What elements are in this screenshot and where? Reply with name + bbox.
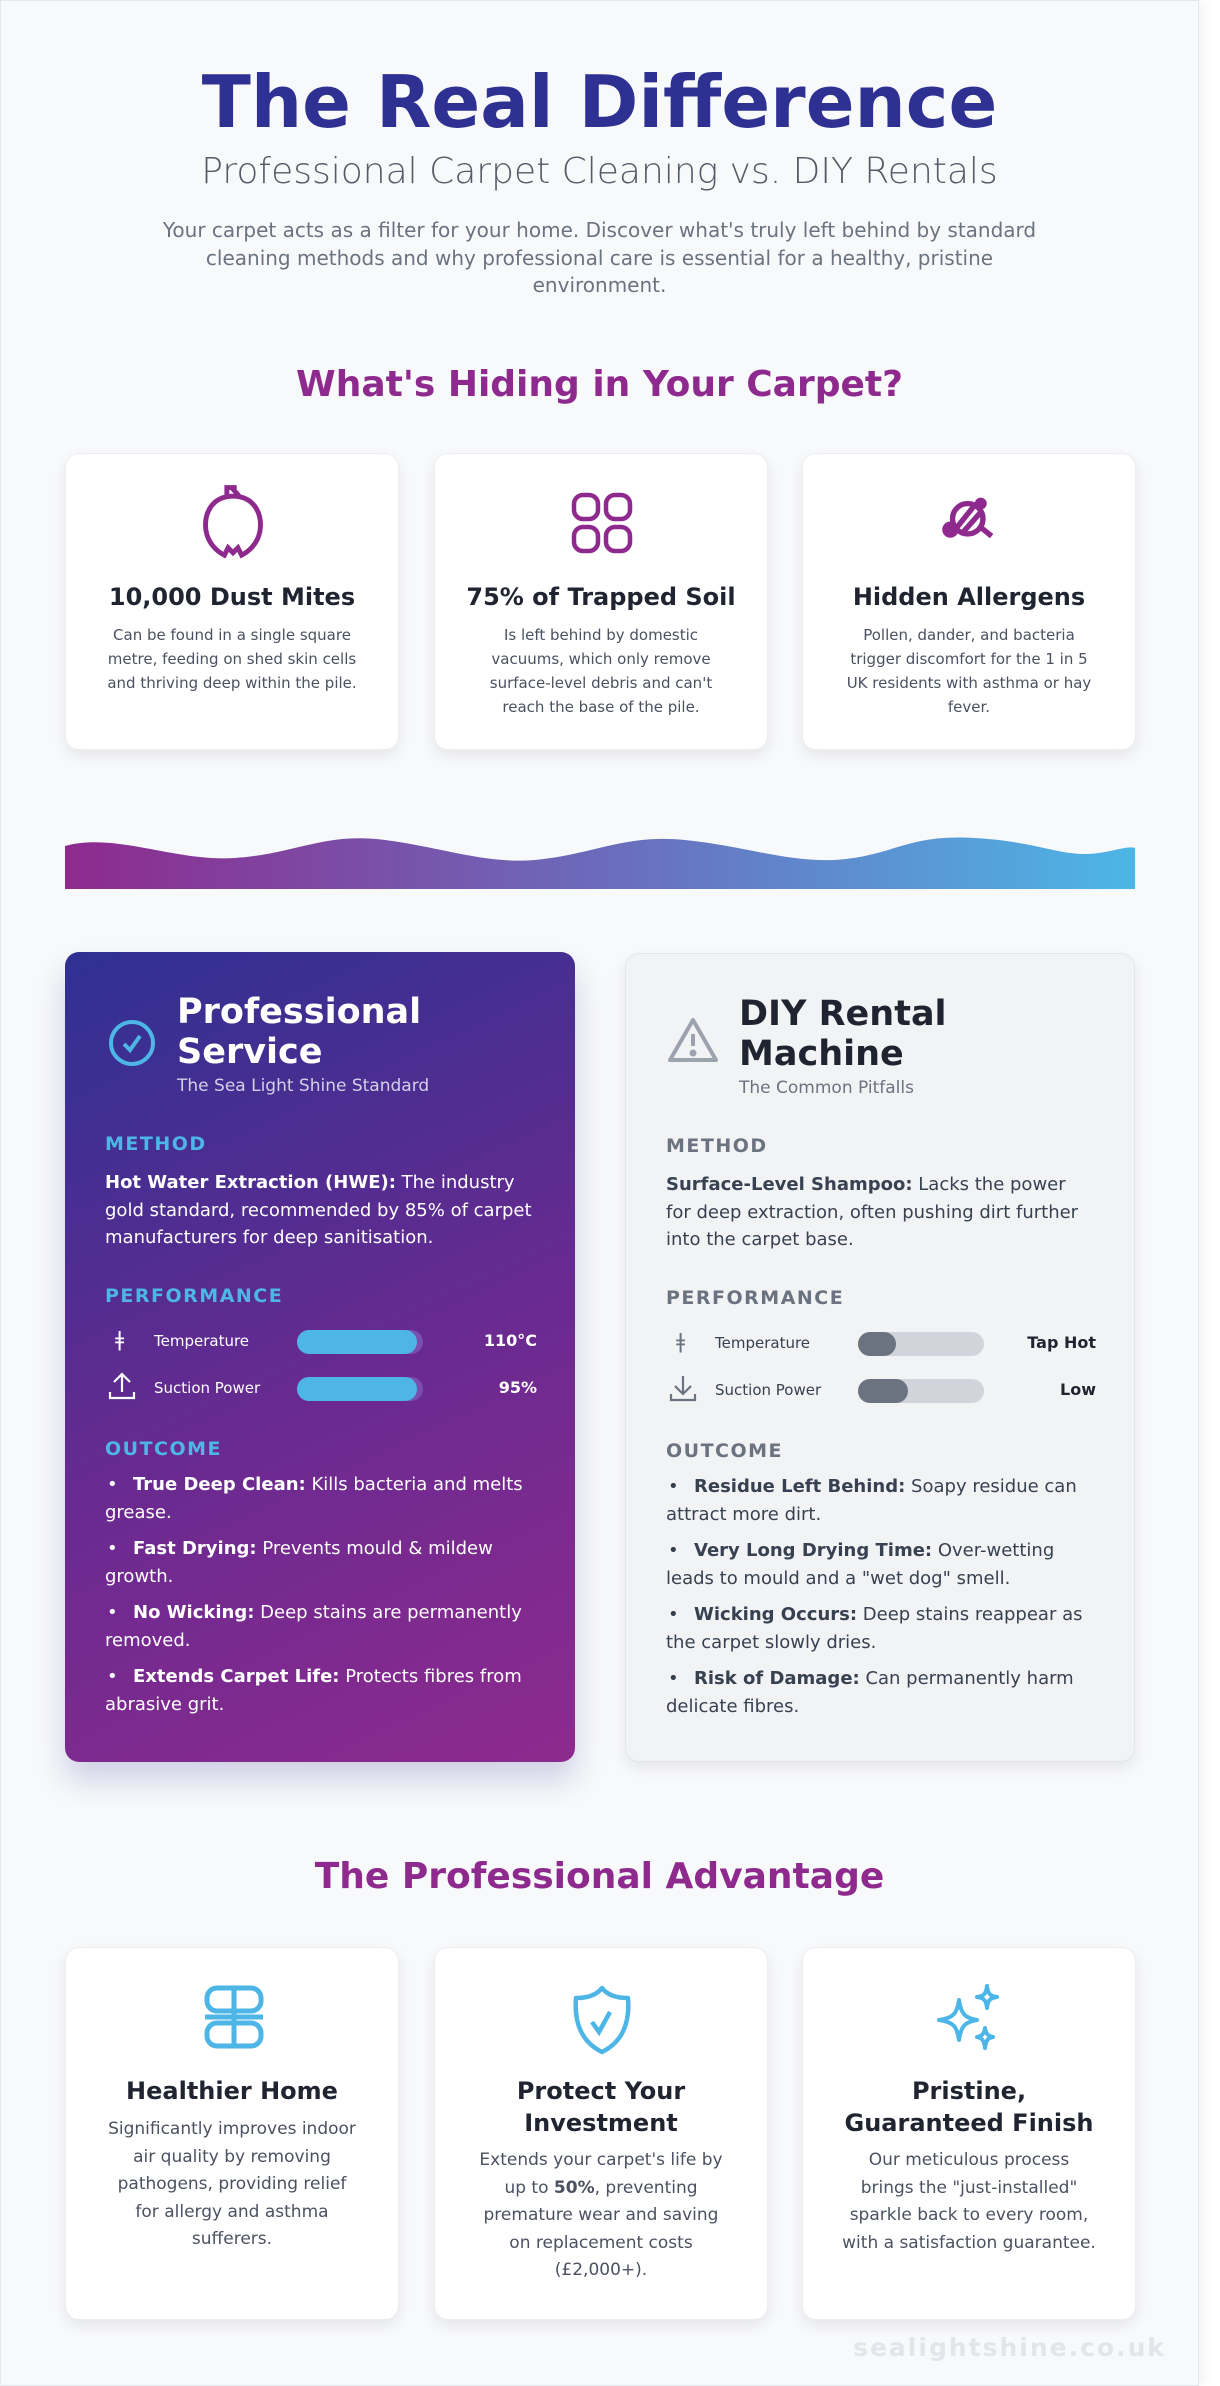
panel: DIY rental: The Common Pitfalls	[739, 1078, 914, 1098]
card: trapped soil: 75% of Trapped Soil	[466, 583, 736, 611]
card: pristine finish: Guaranteed Finish	[845, 2109, 1093, 2137]
outcome list: Fast Drying: Prevents mould & mildew growth.	[105, 1538, 493, 1586]
intro text: Your carpet acts as a filter for your home. Discover what's truly left behind by standard cleaning methods and why professional care is essential for a healthy, pristine environment.	[163, 218, 1036, 297]
card: allergens	[802, 453, 1136, 750]
card: dust mites: Can be found in a single square metre, feeding on shed skin cells and thriving deep within the pile.	[107, 626, 357, 692]
card: healthier home: Healthier Home	[126, 2077, 338, 2105]
bar: suction: 95%	[499, 1378, 537, 1397]
card: protect investment: Investment	[524, 2109, 678, 2137]
bar: temperature: 110°C	[484, 1331, 537, 1350]
card: trapped soil: Is left behind by domestic vacuums, which only remove surface-level debris and can't reach the base of the pile.	[490, 626, 712, 716]
footer: website: sealightshine.co.uk	[853, 2333, 1166, 2362]
icon: lungs/filter	[204, 1986, 264, 2048]
panel: DIY rental: OUTCOME	[666, 1440, 783, 1462]
card: allergens: Hidden Allergens	[853, 583, 1085, 611]
panel: professional service: Hot Water Extraction (HWE): The industry gold standard, recommended by 85% of carpet manufacturers for deep sanitisation.	[105, 1172, 532, 1248]
title: The Real Difference	[202, 60, 997, 144]
icon: shield	[573, 1986, 631, 2054]
panel: DIY rental: METHOD	[666, 1135, 768, 1157]
heading: Machine	[739, 1034, 904, 1074]
card: dust mites: 10,000 Dust Mites	[109, 583, 355, 611]
card: healthier home: Significantly improves indoor air quality by removing pathogens, providing relief for allergy and asthma sufferers.	[108, 2119, 356, 2249]
outcome list: True Deep Clean: Kills bacteria and melts grease.	[105, 1474, 523, 1522]
outcome list: Risk of Damage: Can permanently harm delicate fibres.	[666, 1668, 1074, 1716]
panel: DIY rental: PERFORMANCE	[666, 1287, 844, 1309]
heading: professional advantage: The Professional Advantage	[315, 1856, 884, 1897]
heading	[739, 994, 947, 1074]
subtitle: Professional Carpet Cleaning vs. DIY Rentals	[201, 151, 998, 192]
outcome list: Wicking Occurs: Deep stains reappear as the carpet slowly dries.	[666, 1604, 1082, 1652]
outcome list	[105, 1474, 523, 1714]
bar: suction: Low	[1060, 1380, 1096, 1399]
card: protect investment: Protect Your	[517, 2077, 685, 2105]
card: protect investment	[434, 1947, 768, 2320]
bar: suction: Suction Power	[715, 1381, 821, 1399]
panel: professional service: PERFORMANCE	[105, 1285, 283, 1307]
card: protect investment: Extends your carpet's life by up to 50%, preventing premature wear and saving on replacement costs (£2,000+).	[479, 2150, 723, 2280]
outcome list: Extends Carpet Life: Protects fibres from abrasive grit.	[105, 1666, 522, 1714]
outcome list: Very Long Drying Time: Over-wetting leads to mould and a "wet dog" smell.	[666, 1540, 1054, 1588]
panel: DIY rental: Surface-Level Shampoo: Lacks the power for deep extraction, often pushing dirt further into the carpet base.	[666, 1174, 1078, 1250]
icon: mite	[203, 485, 263, 558]
bar: suction: Suction Power	[154, 1379, 260, 1397]
bar: temperature	[115, 1327, 537, 1354]
panel: professional service: METHOD	[105, 1133, 207, 1155]
icon: check circle	[109, 1020, 155, 1066]
outcome list: No Wicking: Deep stains are permanently removed.	[105, 1602, 522, 1650]
panel: professional service: The Sea Light Shine Standard	[177, 1076, 429, 1096]
wave divider	[65, 838, 1135, 889]
heading: Service	[177, 1032, 323, 1072]
icon: grid	[572, 492, 632, 554]
bar: suction	[108, 1372, 537, 1401]
card: dust mites	[65, 453, 399, 750]
heading: DIY Rental	[739, 994, 947, 1034]
bar: suction	[670, 1376, 1096, 1403]
icon: sparkles	[937, 1984, 999, 2050]
card: trapped soil	[434, 453, 768, 750]
card: pristine finish	[802, 1947, 1136, 2320]
outcome list: Residue Left Behind: Soapy residue can attract more dirt.	[666, 1476, 1077, 1524]
bar: temperature: Tap Hot	[1027, 1333, 1096, 1352]
panel: professional service	[65, 952, 575, 1762]
card: healthier home	[65, 1947, 399, 2320]
card: allergens: Pollen, dander, and bacteria trigger discomfort for the 1 in 5 UK residents with asthma or hay fever.	[847, 626, 1091, 716]
icon: allergen	[942, 498, 994, 538]
heading: Professional	[177, 992, 421, 1032]
panel: professional service: OUTCOME	[105, 1438, 222, 1460]
heading	[177, 992, 421, 1072]
card: pristine finish: Pristine,	[912, 2077, 1026, 2105]
bar: temperature: ǂ	[676, 1329, 685, 1353]
panel: DIY rental	[625, 953, 1135, 1762]
bar: temperature	[676, 1329, 1096, 1356]
bar: temperature: Temperature	[715, 1334, 810, 1352]
bar: temperature: Temperature	[154, 1332, 249, 1350]
outcome list	[666, 1476, 1082, 1716]
card: pristine finish: Our meticulous process brings the "just-installed" sparkle back to every room, with a satisfaction guarantee.	[842, 2150, 1096, 2252]
bar: temperature: ǂ	[115, 1327, 124, 1351]
heading: what's hiding: What's Hiding in Your Carpet?	[296, 364, 903, 405]
icon: warning	[668, 1018, 718, 1062]
